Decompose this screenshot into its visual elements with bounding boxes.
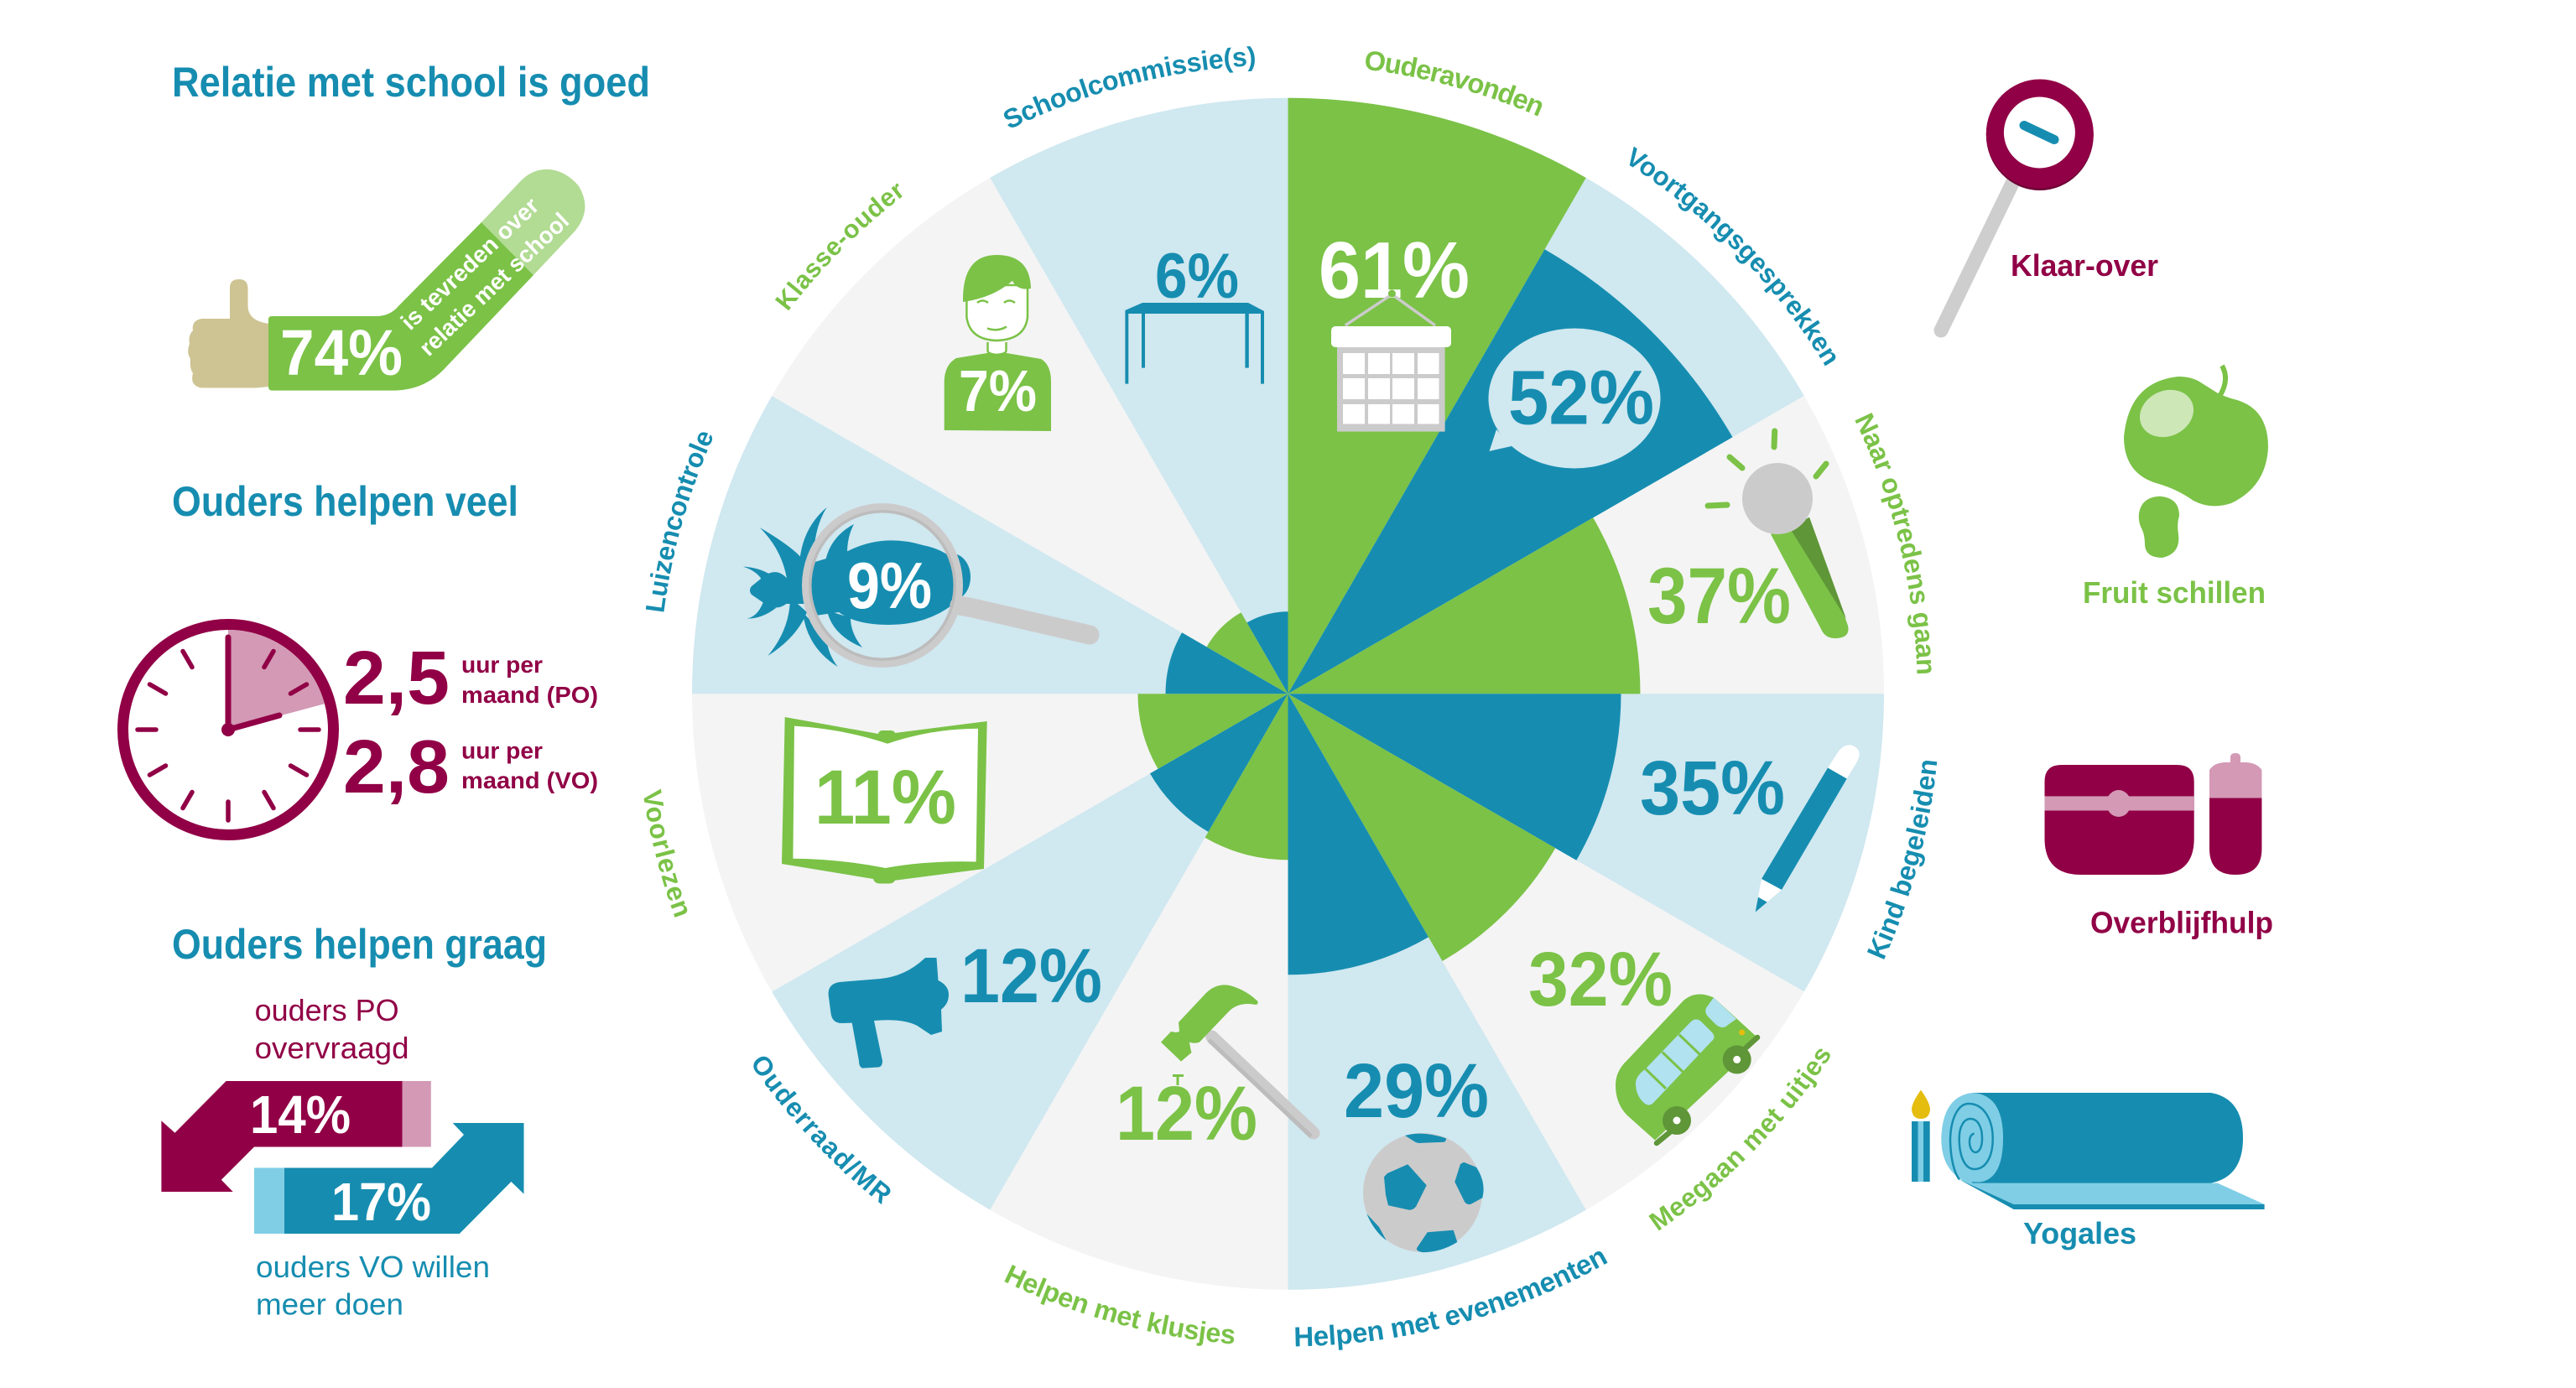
text: ouders PO overvraagd (255, 993, 409, 1065)
panel: radial bar chart of parent activities (623, 29, 1953, 1359)
icon: open book with 11%: 11% (814, 755, 956, 840)
stat: 2,5 uur per maand PO: 2,5 (343, 637, 450, 720)
curved activity labels around the chart: Klasse-ouder (775, 183, 903, 310)
stat: 2,5 uur per maand PO (343, 637, 598, 720)
icon: football with 29%: 29% (1344, 1048, 1489, 1134)
heading: relatie met school: Relatie met school is goed (172, 59, 650, 106)
text: ouders VO willen meer doen (256, 1250, 490, 1322)
icon: megaphone with 12%: 12% (960, 933, 1102, 1019)
stat: 2,8 uur per maand VO: maand (VO) (461, 767, 598, 793)
curved activity labels around the chart: Ouderraad/MR (753, 1057, 891, 1204)
text: ouders VO willen meer doen: ouders VO willen (256, 1250, 490, 1284)
text: ouders PO overvraagd: ouders PO (255, 993, 399, 1027)
curved activity labels around the chart: Luizencontrole (646, 432, 713, 612)
icon: clock showing 2.5 hours (122, 624, 334, 835)
icon: speech bubble with 52%: 52% (1508, 356, 1654, 441)
icon: open book with 11% (782, 717, 987, 884)
arrow: blue 17% (254, 1123, 523, 1234)
icon: calendar with 61% (1319, 226, 1470, 432)
icon: louse under magnifying glass with 9% (743, 507, 1090, 667)
icon: thumb up arm with 74%: 74% (280, 317, 403, 389)
text: ouders PO overvraagd: overvraagd (255, 1031, 409, 1065)
icon: table with 6%: 6% (1155, 241, 1239, 312)
curved activity labels around the chart: Meegaan met uitjes (1648, 1048, 1830, 1231)
icon: calendar with 61%: 61% (1319, 226, 1470, 315)
icon: bus with 32%: 32% (1528, 937, 1673, 1022)
curved activity labels around the chart: Kind begeleiden (1867, 761, 1938, 959)
stat: 2,5 uur per maand PO: uur per (461, 652, 543, 678)
curved activity labels around the chart: Schoolcommissie(s) (1003, 46, 1255, 127)
label: yogales: Yogales (2023, 1216, 2136, 1250)
curved activity labels around the chart: Naar optredens gaan (1855, 413, 1932, 674)
heading: ouders helpen veel: Ouders helpen veel (172, 478, 518, 525)
icon: class parent with 7% (945, 255, 1051, 431)
icon: apple with core (2124, 366, 2268, 558)
heading: ouders helpen graag: Ouders helpen graag (172, 921, 547, 968)
label: klaar-over: Klaar-over (2011, 248, 2158, 283)
icon: bus with 32% (1528, 937, 1757, 1143)
stat: 2,5 uur per maand PO: maand (PO) (461, 682, 598, 708)
icon: megaphone with 12% (829, 933, 1102, 1068)
icon: rolled yoga mat (1941, 1093, 2265, 1209)
icon: thumb up arm with 74%: relatie met school (414, 207, 574, 361)
icon: speech bubble with 52% (1488, 329, 1661, 468)
arrow: maroon 14%: 14% (250, 1084, 351, 1145)
icon: candle (1912, 1090, 1930, 1182)
icon: hammer with 12% (1116, 985, 1314, 1157)
arrow: maroon 14% (161, 1081, 431, 1192)
stat: 2,8 uur per maand VO: uur per (461, 738, 543, 763)
curved activity labels around the chart: Voortgangsgesprekken (1629, 146, 1835, 366)
icon: thumb up arm with 74% (188, 169, 585, 391)
icon: thumb up arm with 74%: is tevreden over (396, 192, 544, 335)
icon: microphone with 37%: 37% (1647, 552, 1791, 641)
curved activity labels around the chart (644, 46, 1988, 1350)
icon: table with 6% (1125, 241, 1264, 384)
curved activity labels around the chart: Helpen met klusjes (1005, 1265, 1235, 1346)
curved activity labels around the chart: Ouderavonden (1366, 51, 1542, 116)
text: ouders VO willen meer doen: meer doen (256, 1287, 403, 1322)
icon: louse under magnifying glass with 9%: 9% (847, 548, 932, 622)
curved activity labels around the chart: Helpen met evenementen (1295, 1251, 1607, 1350)
icon: class parent with 7%: 7% (959, 358, 1037, 424)
icon: hammer with 12%: 12% (1116, 1071, 1257, 1157)
curved activity labels around the chart: Voorlezen (644, 788, 688, 918)
icon: lunchbox and drink bottle (2045, 753, 2261, 875)
arrow: blue 17%: 17% (331, 1172, 431, 1232)
icon: football with 29% (1344, 1048, 1489, 1252)
icon: klaar-over stop sign (1941, 79, 2094, 330)
icon: pencil with 35%: 35% (1640, 746, 1785, 831)
label: overblijfhulp: Overblijfhulp (2090, 906, 2273, 940)
stat: 2,8 uur per maand VO: 2,8 (343, 725, 450, 809)
stat: 2,8 uur per maand VO (343, 725, 598, 809)
icon: pencil with 35% (1640, 745, 1860, 912)
icon: microphone with 37% (1647, 431, 1848, 641)
label: fruit schillen: Fruit schillen (2083, 575, 2266, 610)
